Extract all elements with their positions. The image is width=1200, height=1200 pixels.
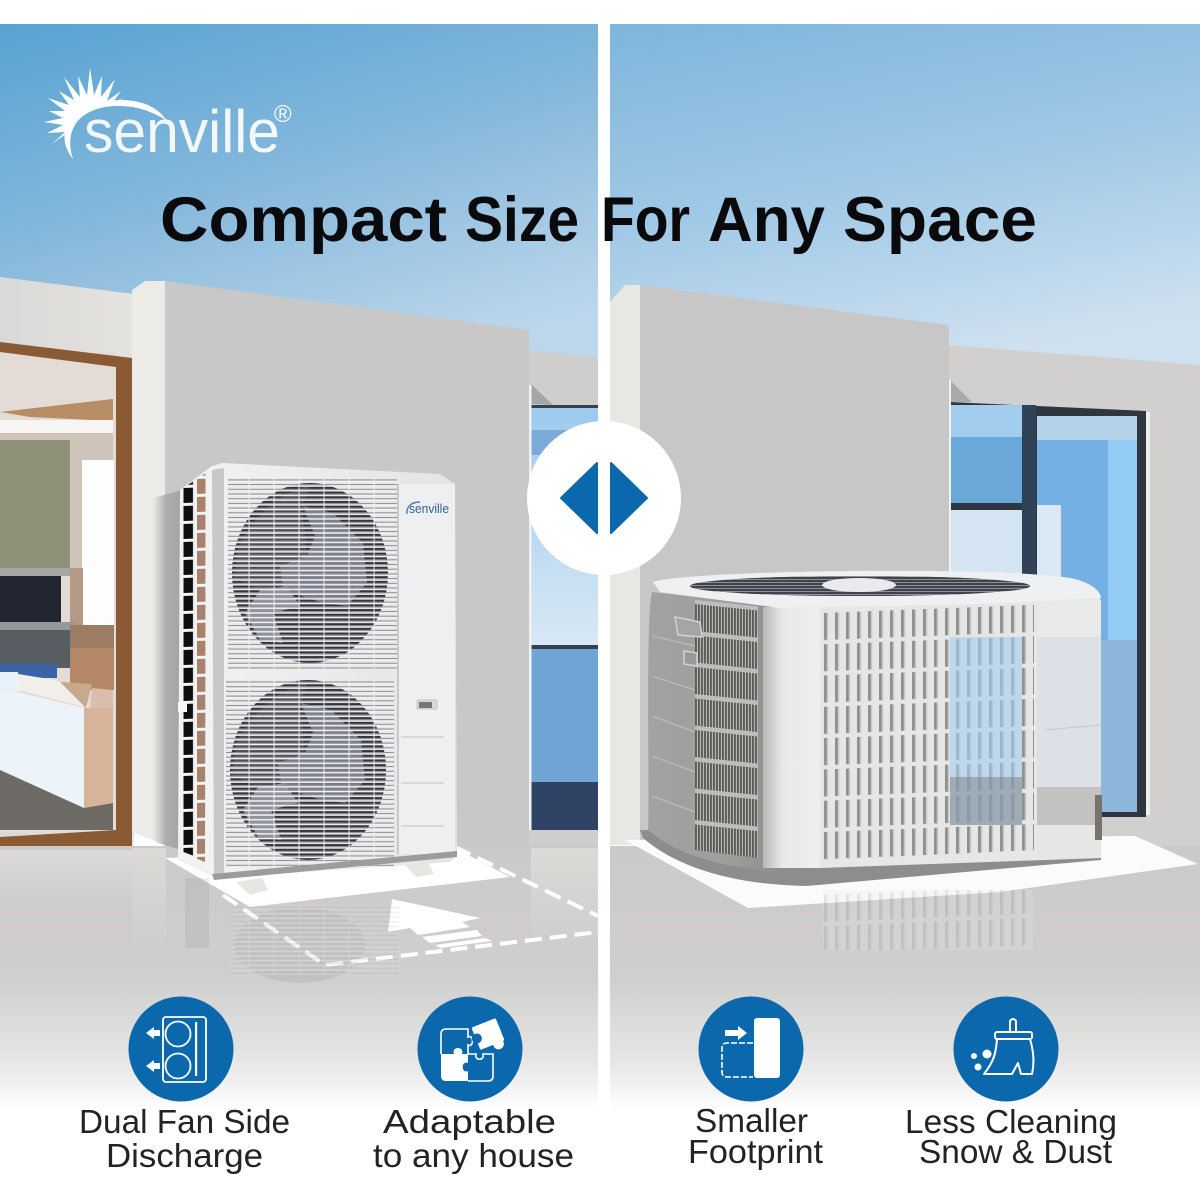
title: Any [708, 185, 825, 255]
reflection right [823, 890, 1033, 950]
dashed footprint outline [223, 847, 598, 965]
icon: brush [954, 996, 1058, 1102]
mini senville logo on unit: senville [409, 502, 449, 516]
condenser front [820, 594, 1101, 868]
white footprint right [625, 836, 1198, 908]
translucent right panel [1037, 600, 1102, 857]
left louvres [695, 600, 758, 858]
right service panel [397, 484, 455, 854]
logo: senville [44, 68, 292, 165]
title: For [601, 185, 690, 255]
feature: adaptable: to any house [373, 1137, 574, 1174]
icon: dual fan [128, 996, 234, 1102]
label: Adaptable [383, 1103, 556, 1140]
condenser base [640, 830, 1101, 886]
icon: puzzle [418, 996, 522, 1102]
comparison badge with arrows [527, 421, 681, 575]
feature: less cleaning: Snow & Dust [919, 1133, 1112, 1170]
label: Smaller [695, 1102, 808, 1139]
sky right [610, 24, 1200, 394]
sky left [0, 24, 598, 358]
title: Compact [160, 185, 447, 255]
floor right [610, 846, 1200, 1110]
wall beside door [0, 277, 134, 850]
label: Dual Fan Side [79, 1103, 290, 1140]
upper fan grille [228, 478, 397, 669]
sun rays [44, 68, 124, 144]
logo: senville: senville [84, 98, 280, 165]
front louvres [823, 604, 1034, 860]
pillar right [610, 285, 641, 845]
crescent [64, 100, 167, 159]
arrow on floor [388, 899, 492, 948]
panel: conventional unit scene [610, 24, 1200, 1200]
left face seams [652, 636, 695, 812]
condenser lid with fan grill [653, 571, 1101, 608]
condenser left face [648, 592, 780, 872]
left controls [675, 617, 702, 666]
rounded corner [763, 607, 820, 868]
logo: senville: ® [274, 101, 292, 128]
main wall right [640, 285, 949, 860]
title: Space [843, 185, 1037, 255]
main wall left [165, 281, 529, 860]
white footprint on floor [165, 847, 510, 907]
feature: smaller footprint: Footprint [688, 1133, 823, 1170]
unit side with coil holes [178, 466, 212, 876]
feature: dual fan side discharge: Discharge [106, 1137, 263, 1174]
lower fan grille [226, 680, 394, 867]
outdoor unit: conventional round condenser [640, 571, 1102, 886]
feature: dual fan side discharge [79, 996, 290, 1174]
door with living room interior [0, 342, 132, 850]
wall shadow behind unit [154, 490, 180, 849]
unit base and feet [212, 851, 457, 895]
feature: smaller footprint [688, 996, 823, 1170]
icon: footprint [698, 996, 804, 1102]
upper wall and window [529, 350, 598, 860]
upper wall right [949, 345, 1200, 860]
vertical divider [598, 0, 610, 1200]
panel: Senville unit scene [0, 24, 598, 1200]
outdoor unit: Senville [178, 463, 457, 895]
top white band [0, 0, 1200, 24]
floor left [0, 846, 598, 1110]
feature: adaptable [373, 996, 574, 1174]
unit front [210, 463, 457, 878]
unit reflection [185, 878, 400, 983]
label: Less Cleaning [905, 1103, 1117, 1140]
see-through window area [950, 637, 1022, 825]
feature: less cleaning [905, 996, 1117, 1170]
reflections on floor [0, 848, 598, 894]
pillar left [132, 281, 166, 845]
title: Size [465, 185, 579, 255]
window right [949, 380, 1150, 817]
